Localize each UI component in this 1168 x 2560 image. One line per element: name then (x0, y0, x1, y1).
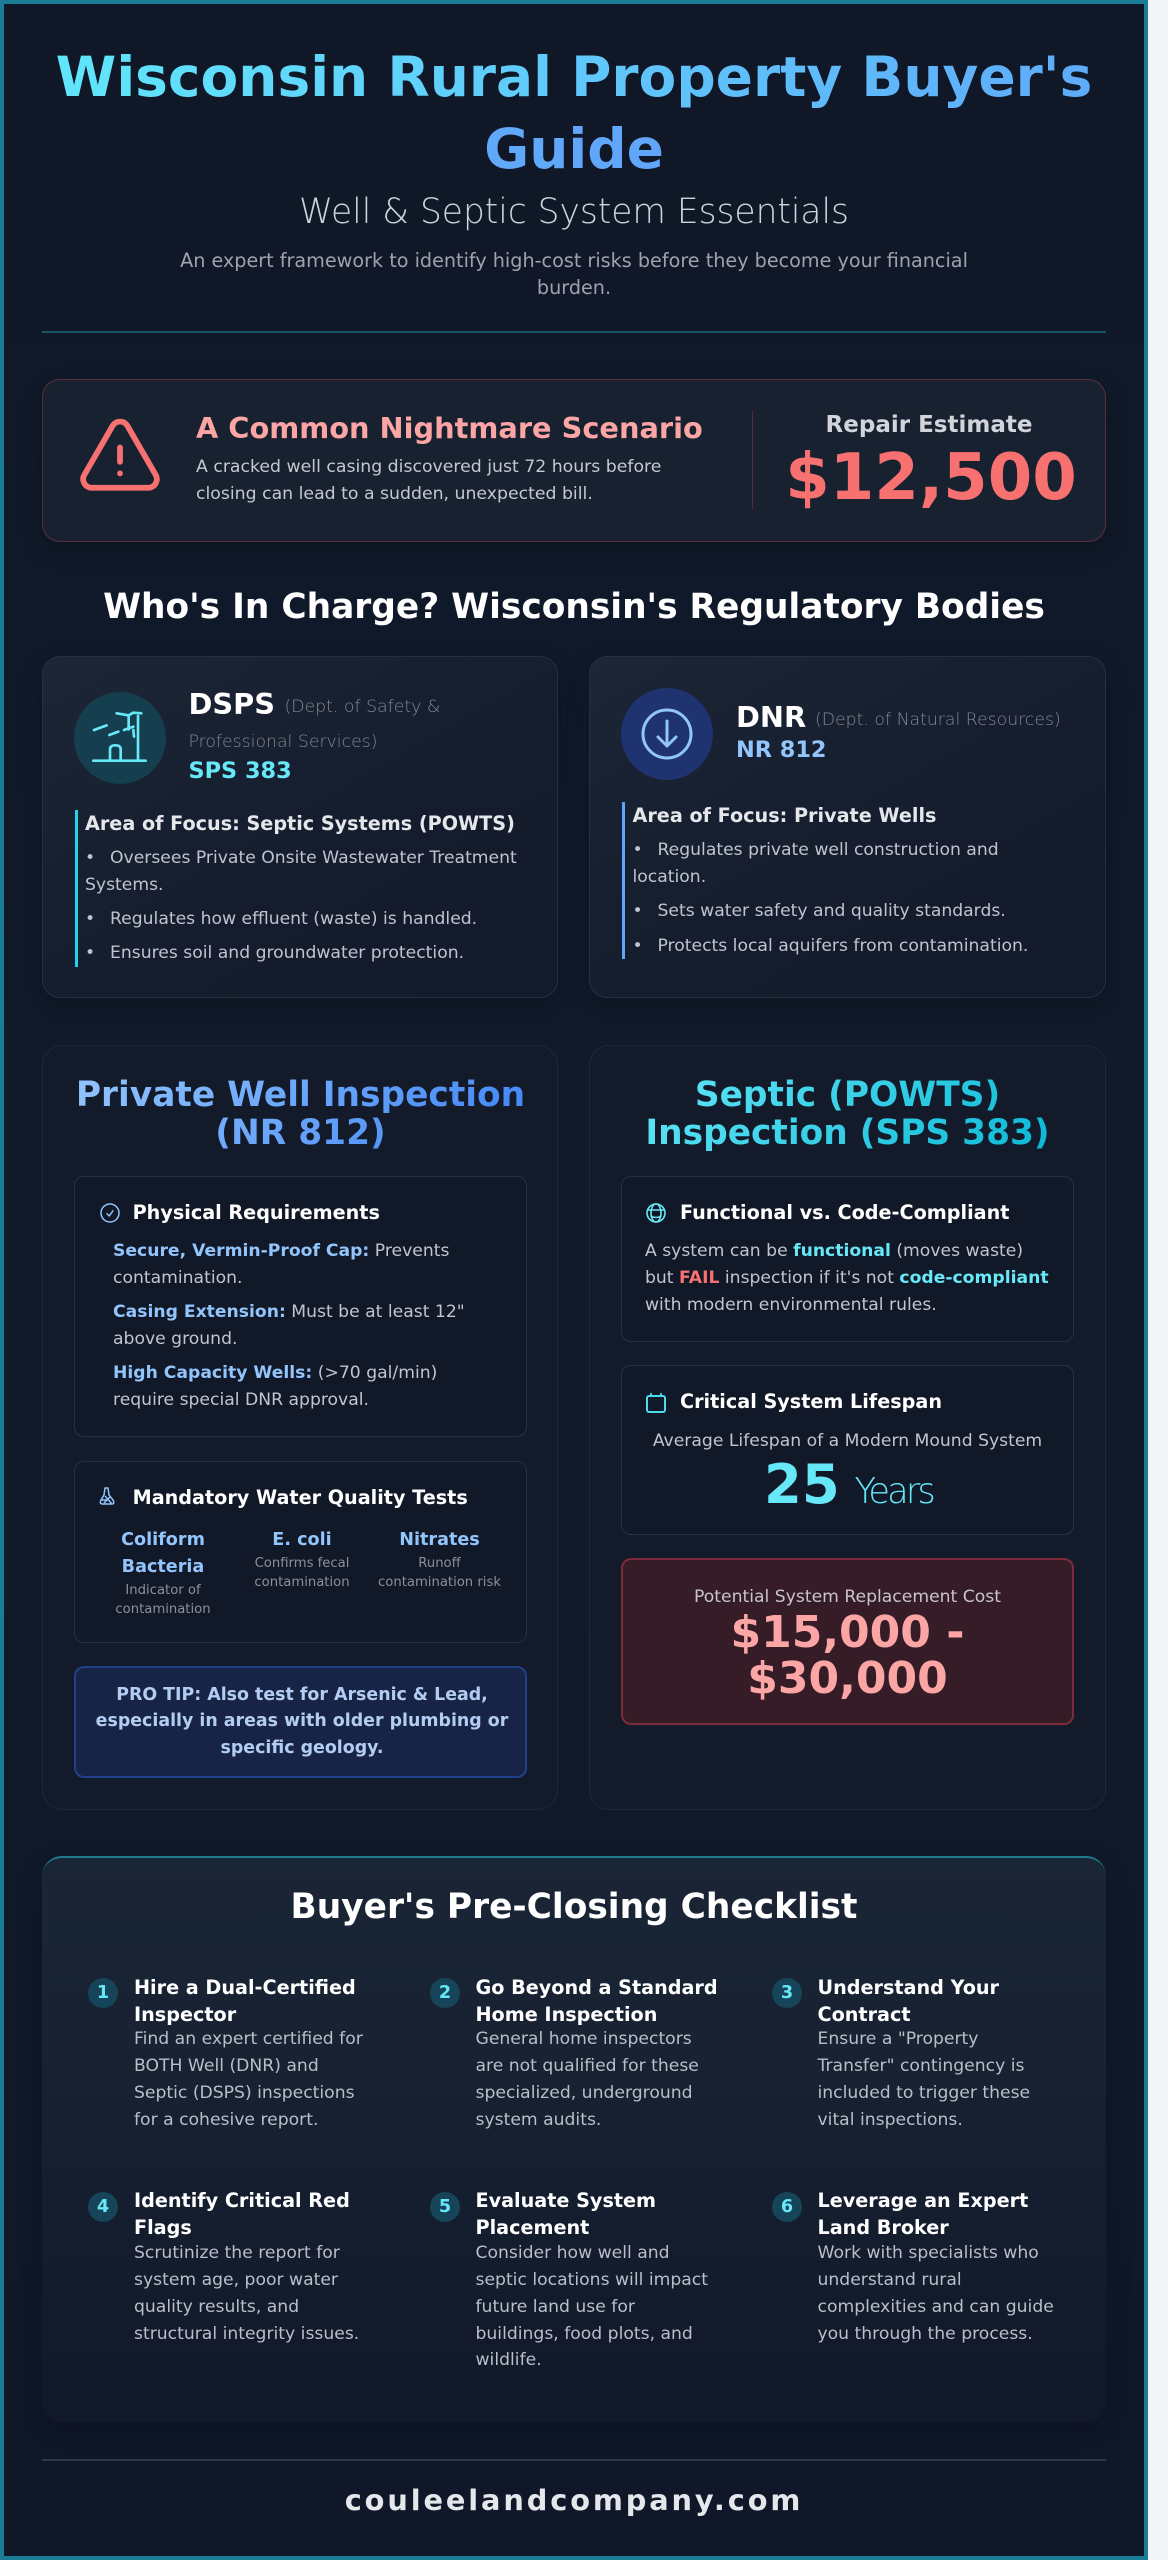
icon: globe (646, 1203, 666, 1223)
item 4 text: Scrutinize the report for (134, 2243, 340, 2263)
replacement cost value: $15,000 - (730, 1607, 964, 1658)
item 3 (772, 1976, 1030, 2130)
DNR focus list: • (632, 840, 643, 860)
item 2 text: General home inspectors (476, 2029, 692, 2049)
callout: pro tip: specific geology. (220, 1738, 384, 1758)
item 2 heading: Go Beyond a Standard (476, 1976, 718, 1999)
item 4 heading (134, 2189, 350, 2239)
number 3 (772, 1978, 802, 2008)
requirement: cap (113, 1241, 449, 1288)
requirement: casing: Casing Extension: Must be at least 12" (113, 1302, 465, 1322)
DNR focus list: • (632, 936, 643, 956)
item 2 (430, 1976, 718, 2130)
item 1 text: for a cohesive report. (134, 2110, 318, 2130)
test: coliform (115, 1530, 211, 1617)
requirement: capacity: require special DNR approval. (113, 1390, 369, 1410)
card: system lifespan (621, 1365, 1074, 1535)
test: e. coli: Confirms fecal (255, 1556, 349, 1571)
item 2 text: specialized, underground (476, 2083, 693, 2103)
lifespan label: Average Lifespan of a Modern Mound System (653, 1431, 1042, 1451)
number 5 (430, 2192, 460, 2222)
item 1 text: Septic (DSPS) inspections (134, 2083, 355, 2103)
requirement: casing (113, 1302, 465, 1349)
DSPS focus list: Ensures soil and groundwater protection. (110, 943, 464, 963)
lifespan value: Years (854, 1471, 933, 1512)
heading: functional vs compliant: Functional vs. Code-Compliant (680, 1201, 1009, 1224)
item 5 text: wildlife. (476, 2350, 542, 2370)
title: Wisconsin Rural Property Buyer's (56, 44, 1092, 108)
replacement cost label: Potential System Replacement Cost (694, 1586, 1001, 1606)
item 5 heading: Placement (476, 2216, 589, 2239)
test: nitrates: contamination risk (378, 1575, 501, 1590)
item 6 heading: Land Broker (818, 2216, 949, 2239)
lifespan value: 25 (764, 1453, 840, 1516)
test: coliform: Indicator of (125, 1583, 201, 1598)
DSPS full name: (Dept. of Safety & (284, 697, 440, 717)
heading: checklist: Buyer's Pre-Closing Checklist (291, 1887, 857, 1927)
heading: private well inspection: Private Well Inspection (76, 1075, 525, 1115)
item 4 text (134, 2243, 359, 2344)
DSPS focus list: Regulates how effluent (waste) is handled. (110, 909, 477, 929)
DSPS focus list: • (85, 943, 95, 963)
number 5: 5 (439, 2197, 451, 2217)
icon: warning triangle (80, 418, 160, 491)
DNR full name: (Dept. of Natural Resources) (815, 710, 1061, 730)
title (56, 44, 1092, 180)
DNR name: DNR (736, 700, 806, 734)
DNR focus list: • (632, 901, 643, 921)
DNR focus list: Protects local aquifers from contamination. (658, 936, 1028, 956)
panel: septic inspection (589, 1045, 1106, 1810)
DNR focus heading: Area of Focus: Private Wells (632, 804, 936, 827)
item 5 text: buildings, food plots, and (476, 2324, 693, 2344)
item 5 heading: Evaluate System (476, 2189, 656, 2212)
test: nitrates: Runoff (418, 1556, 461, 1571)
number 1 (88, 1978, 118, 2008)
icon: check circle (100, 1203, 120, 1223)
item 1 heading: Inspector (134, 2003, 236, 2026)
section heading: regulatory bodies: Who's In Charge? Wisconsin's Regulatory Bodies (103, 587, 1045, 627)
panel: DNR (589, 656, 1106, 998)
DSPS full name: Professional Services) (188, 732, 377, 752)
test: e. coli: contamination (254, 1575, 350, 1590)
item 4 heading: Identify Critical Red (134, 2189, 350, 2212)
item 5 (430, 2189, 708, 2370)
requirement: capacity: High Capacity Wells: (>70 gal/min) (113, 1363, 437, 1383)
test: nitrates: Nitrates (399, 1530, 480, 1550)
tagline (180, 248, 968, 298)
heading: physical requirements: Physical Requirements (133, 1201, 380, 1224)
functional vs compliant text (645, 1241, 1049, 1315)
tagline: burden. (537, 276, 611, 298)
item 6 text: understand rural (818, 2270, 962, 2290)
heading: septic inspection (621, 1076, 1074, 1153)
number 3: 3 (781, 1983, 793, 2003)
DSPS focus list: • (85, 909, 95, 929)
item 2 heading (476, 1976, 718, 2026)
number 2 (430, 1978, 460, 2008)
test: coliform: Bacteria (122, 1557, 204, 1577)
footer website: couleelandcompany.com (345, 2482, 803, 2516)
subtitle: Well & Septic System Essentials (299, 192, 849, 232)
item 3 text (817, 2029, 1030, 2130)
test: e. coli (254, 1530, 350, 1590)
tagline: An expert framework to identify high-cost risks before they become your financial (180, 248, 968, 272)
icon: DSPS building (74, 692, 166, 784)
functional vs compliant text: but FAIL inspection if it's not code-compliant (645, 1268, 1049, 1288)
item 4 (88, 2189, 359, 2344)
item 1 heading (134, 1976, 356, 2026)
card: physical requirements (74, 1176, 527, 1437)
callout: replacement cost (621, 1558, 1074, 1725)
requirement: cap: contamination. (113, 1268, 242, 1288)
callout: pro tip: especially in areas with older plumbing or (96, 1711, 508, 1731)
item 3 text: vital inspections. (818, 2110, 963, 2130)
item 1 text (134, 2029, 363, 2130)
item 6 heading (818, 2189, 1028, 2239)
alert heading: A Common Nightmare Scenario (196, 411, 703, 445)
DSPS focus heading: Area of Focus: Septic Systems (POWTS) (85, 812, 515, 835)
item 1 (88, 1976, 363, 2130)
DNR focus list: location. (632, 867, 706, 887)
item 4 text: quality results, and (134, 2297, 299, 2317)
panel: DSPS (42, 656, 558, 998)
item 2 text (476, 2029, 699, 2130)
icon: calendar (646, 1393, 666, 1413)
item 3 text: Transfer" contingency is (818, 2056, 1024, 2076)
item 4 heading: Flags (134, 2216, 192, 2239)
DSPS code: SPS 383 (188, 758, 292, 784)
item 5 heading (476, 2189, 656, 2239)
item 3 heading: Contract (818, 2003, 911, 2026)
DSPS focus list (85, 848, 517, 963)
panel: pre-closing checklist (42, 1856, 1106, 2422)
test: coliform: contamination (115, 1602, 211, 1617)
heading: private well inspection (74, 1076, 527, 1153)
heading: septic inspection: Inspection (SPS 383) (645, 1113, 1050, 1153)
DSPS focus list: Oversees Private Onsite Wastewater Treatment (110, 848, 517, 868)
heading: system lifespan: Critical System Lifespan (680, 1390, 942, 1413)
lifespan value (764, 1453, 934, 1516)
requirement: capacity (113, 1363, 437, 1410)
heading: water quality tests: Mandatory Water Quality Tests (133, 1486, 468, 1509)
number 4: 4 (97, 2197, 109, 2217)
callout: pro tip (74, 1666, 527, 1778)
item 1 heading: Hire a Dual-Certified (134, 1976, 356, 1999)
item 1 text: Find an expert certified for (134, 2029, 363, 2049)
alert text (196, 456, 661, 504)
DSPS full name (188, 697, 440, 752)
number 4 (88, 2192, 118, 2222)
item 6 text: complexities and can guide (818, 2297, 1054, 2317)
repair estimate label: Repair Estimate (826, 412, 1032, 438)
item 6 text: you through the process. (818, 2324, 1033, 2344)
panel: nightmare scenario alert (42, 379, 1106, 542)
number 2: 2 (439, 1983, 451, 2003)
item 3 text: Ensure a "Property (818, 2029, 978, 2049)
panel: private well inspection (42, 1045, 558, 1810)
replacement cost value: $30,000 (747, 1653, 948, 1704)
item 5 text (476, 2243, 708, 2370)
repair estimate value: $12,500 (785, 441, 1077, 515)
item 2 text: are not qualified for these (476, 2056, 699, 2076)
item 3 text: included to trigger these (818, 2083, 1030, 2103)
DSPS focus list: Systems. (85, 875, 164, 895)
item 3 heading (818, 1976, 999, 2026)
DNR focus list: Regulates private well construction and (658, 840, 999, 860)
item 1 text: BOTH Well (DNR) and (134, 2056, 319, 2076)
DNR focus list (632, 840, 1028, 956)
number 1: 1 (97, 1983, 109, 2003)
item 6 text (818, 2243, 1054, 2344)
DSPS name: DSPS (188, 687, 275, 721)
card: water quality tests (74, 1461, 527, 1643)
item 4 text: structural integrity issues. (134, 2324, 359, 2344)
requirement: cap: Secure, Vermin-Proof Cap: Prevents (113, 1241, 449, 1261)
functional vs compliant text: A system can be functional (moves waste) (645, 1241, 1023, 1261)
requirement: casing: above ground. (113, 1329, 237, 1349)
DSPS focus list: • (85, 848, 95, 868)
test: coliform: Coliform (121, 1530, 205, 1550)
callout: pro tip: PRO TIP: Also test for Arsenic & Lead, (116, 1684, 488, 1704)
item 3 heading: Understand Your (818, 1976, 999, 1999)
item 5 text: future land use for (476, 2297, 635, 2317)
item 2 text: system audits. (476, 2110, 601, 2130)
functional vs compliant text: with modern environmental rules. (645, 1295, 937, 1315)
card: functional vs compliant (621, 1176, 1074, 1342)
alert text: closing can lead to a sudden, unexpected bill. (196, 484, 593, 504)
icon: DNR circle arrow (620, 688, 712, 780)
item 5 text: Consider how well and (476, 2243, 670, 2263)
test: nitrates (378, 1530, 501, 1590)
heading: septic inspection: Septic (POWTS) (695, 1075, 1000, 1115)
DNR focus list: Sets water safety and quality standards. (658, 901, 1006, 921)
alert text: A cracked well casing discovered just 72 hours before (196, 456, 661, 476)
DNR code: NR 812 (736, 737, 827, 763)
number 6: 6 (781, 2197, 793, 2217)
title: Guide (484, 116, 664, 180)
item 6 (772, 2189, 1054, 2344)
replacement cost value (730, 1607, 964, 1704)
number 6 (772, 2192, 802, 2222)
heading: private well inspection: (NR 812) (215, 1113, 386, 1153)
test: e. coli: E. coli (272, 1530, 332, 1550)
item 6 heading: Leverage an Expert (818, 2189, 1028, 2212)
item 4 text: system age, poor water (134, 2270, 338, 2290)
item 2 heading: Home Inspection (476, 2003, 657, 2026)
icon: water (100, 1487, 114, 1505)
item 5 text: septic locations will impact (476, 2270, 708, 2290)
item 6 text: Work with specialists who (818, 2243, 1039, 2263)
